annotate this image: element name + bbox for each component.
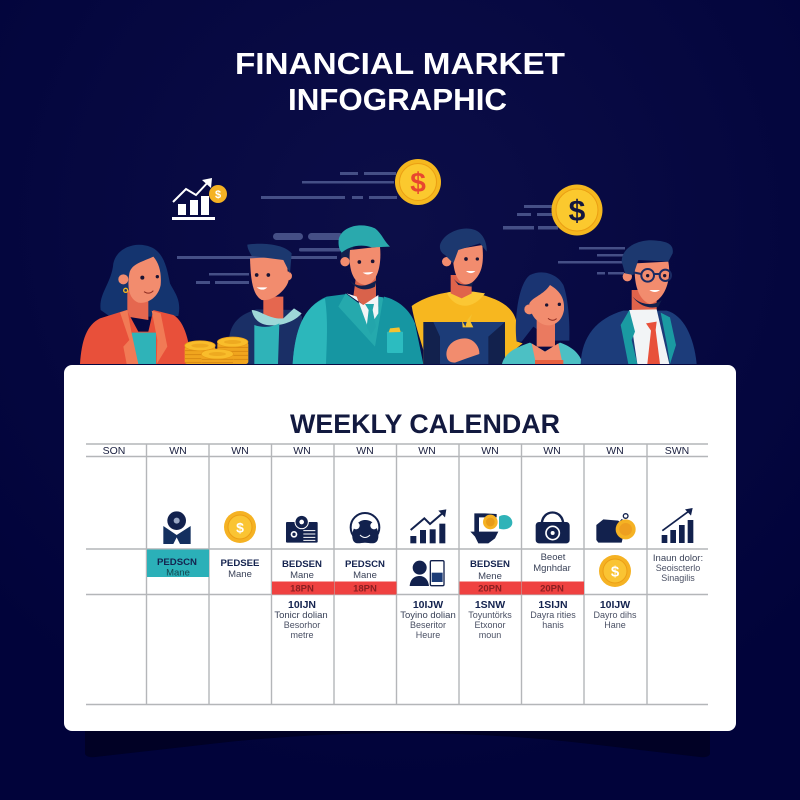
note: 1SIJN: Dayra rities xyxy=(530,610,576,620)
title: INFOGRAPHIC xyxy=(288,82,507,117)
icon: wallet with coin xyxy=(596,514,636,543)
cell: bedsen with red bar: Mane xyxy=(290,570,314,581)
note: 10IJN: 10IJN xyxy=(288,599,316,611)
icon: red dollar coin xyxy=(395,159,441,205)
icon: person with phone xyxy=(410,561,444,586)
cell: beoet 20pn xyxy=(522,552,584,594)
panel: weekly calendar xyxy=(64,365,736,731)
note: 1SNW: Toyuntörks xyxy=(468,610,512,620)
motion lines xyxy=(177,172,625,284)
note: 1SIJN: 1SIJN xyxy=(538,599,568,611)
person: man in navy sweater xyxy=(229,244,302,364)
cell: bedsen with red bar: BEDSEN xyxy=(282,559,322,570)
cell: lorem text: Sinagilis xyxy=(661,573,695,583)
cell: beoet 20pn: 20PN xyxy=(540,584,564,594)
icon: document with camera xyxy=(286,515,318,543)
cell: teal highlight xyxy=(147,550,209,578)
icon: red dollar coin: $ xyxy=(410,167,426,198)
note: 1SIJN: hanis xyxy=(542,620,564,630)
person: woman in teal top xyxy=(502,272,583,364)
calendar grid xyxy=(86,444,708,704)
cell: beoet 20pn: Mgnhdar xyxy=(533,563,571,574)
icon: navy dollar coin xyxy=(552,184,602,236)
icon: gold coin stacks xyxy=(185,337,248,364)
weekday headers: WN xyxy=(481,445,499,457)
note: 10IJW: Beseritor xyxy=(410,620,446,630)
icon: round bear head xyxy=(351,513,379,543)
weekday headers: SWN xyxy=(665,445,689,457)
weekday headers: SON xyxy=(103,445,125,457)
icon: hand with coin xyxy=(470,513,512,543)
icon: rising bars xyxy=(662,508,693,543)
cell: lorem text: Inaun dolor: xyxy=(653,553,703,564)
cell: pedscn with red bar xyxy=(334,559,396,594)
cell: teal highlight: Mane xyxy=(166,568,190,578)
note: 1SNW: moun xyxy=(479,630,501,640)
cell: pedsee xyxy=(221,558,260,580)
weekday headers: WN xyxy=(293,445,311,457)
note: 10IJW second: Dayro dihs xyxy=(593,610,637,620)
icon: padlock bag xyxy=(536,512,570,543)
note: 10IJN xyxy=(274,599,328,640)
cell: lorem text xyxy=(653,553,703,583)
cell: pedscn with red bar: PEDSCN xyxy=(345,559,385,570)
note: 10IJW: Toyino dolian xyxy=(400,610,456,621)
weekday headers: WN xyxy=(418,445,436,457)
icon: growth chart xyxy=(410,509,446,543)
person: man with teal cap and suit xyxy=(293,225,423,364)
note: 1SNW: Etxonor xyxy=(474,620,506,630)
weekday headers: WN xyxy=(543,445,561,457)
weekday headers: WN xyxy=(356,445,374,457)
note: 10IJW xyxy=(400,599,456,640)
cell: bedsen with red bar: 18PN xyxy=(290,584,314,594)
icon: growth chart with coin: $ xyxy=(215,189,221,201)
person: man in suit with glasses xyxy=(581,240,697,364)
calendar heading: WEEKLY CALENDAR xyxy=(290,409,560,439)
note: 1SIJN xyxy=(530,599,576,630)
cell: bedsen 20pn: BEDSEN xyxy=(470,559,510,570)
card shadow xyxy=(85,725,710,757)
weekday headers: WN xyxy=(169,445,187,457)
weekday headers: WN xyxy=(231,445,249,457)
cell: pedsee: Mane xyxy=(228,569,252,580)
icon: gold coin: $ xyxy=(236,520,244,536)
cell: bedsen 20pn: 20PN xyxy=(478,584,502,594)
note: 10IJN: Tonicr dolian xyxy=(274,610,328,621)
icon: large gold coin: $ xyxy=(611,564,620,580)
icon: person with book xyxy=(163,511,191,544)
cell: beoet 20pn: Beoet xyxy=(541,552,566,563)
note: 10IJW: 10IJW xyxy=(413,599,443,611)
icon: navy dollar coin: $ xyxy=(569,195,586,228)
note: 10IJW second: Hane xyxy=(604,620,626,630)
title xyxy=(235,46,565,117)
person: man in yellow shirt with folder xyxy=(412,229,523,364)
cell: pedscn with red bar: 18PN xyxy=(353,584,377,594)
cell: bedsen 20pn xyxy=(460,559,522,594)
cell: bedsen 20pn: Mene xyxy=(478,571,502,582)
cell: pedscn with red bar: Mane xyxy=(353,570,377,581)
note: 10IJN: Besorhor xyxy=(284,620,320,630)
icon: gold coin xyxy=(224,511,256,543)
cell: teal highlight: PEDSCN xyxy=(157,557,197,568)
note: 1SNW: 1SNW xyxy=(475,599,505,611)
icon: growth chart with coin xyxy=(172,178,227,220)
cell: lorem text: Seoiscterlo xyxy=(656,563,700,573)
cell: bedsen with red bar xyxy=(272,559,334,594)
person: woman in red jacket xyxy=(80,245,191,364)
title: FINANCIAL MARKET xyxy=(235,46,565,81)
weekday headers xyxy=(103,445,689,457)
icon: large gold coin xyxy=(599,555,631,587)
note: 10IJN: metre xyxy=(290,630,314,640)
note: 10IJW second: 10IJW xyxy=(600,599,630,611)
note: 1SNW xyxy=(468,599,512,640)
note: 10IJW second xyxy=(593,599,637,630)
weekday headers: WN xyxy=(606,445,624,457)
cell: pedsee: PEDSEE xyxy=(221,558,260,569)
note: 10IJW: Heure xyxy=(416,630,440,640)
